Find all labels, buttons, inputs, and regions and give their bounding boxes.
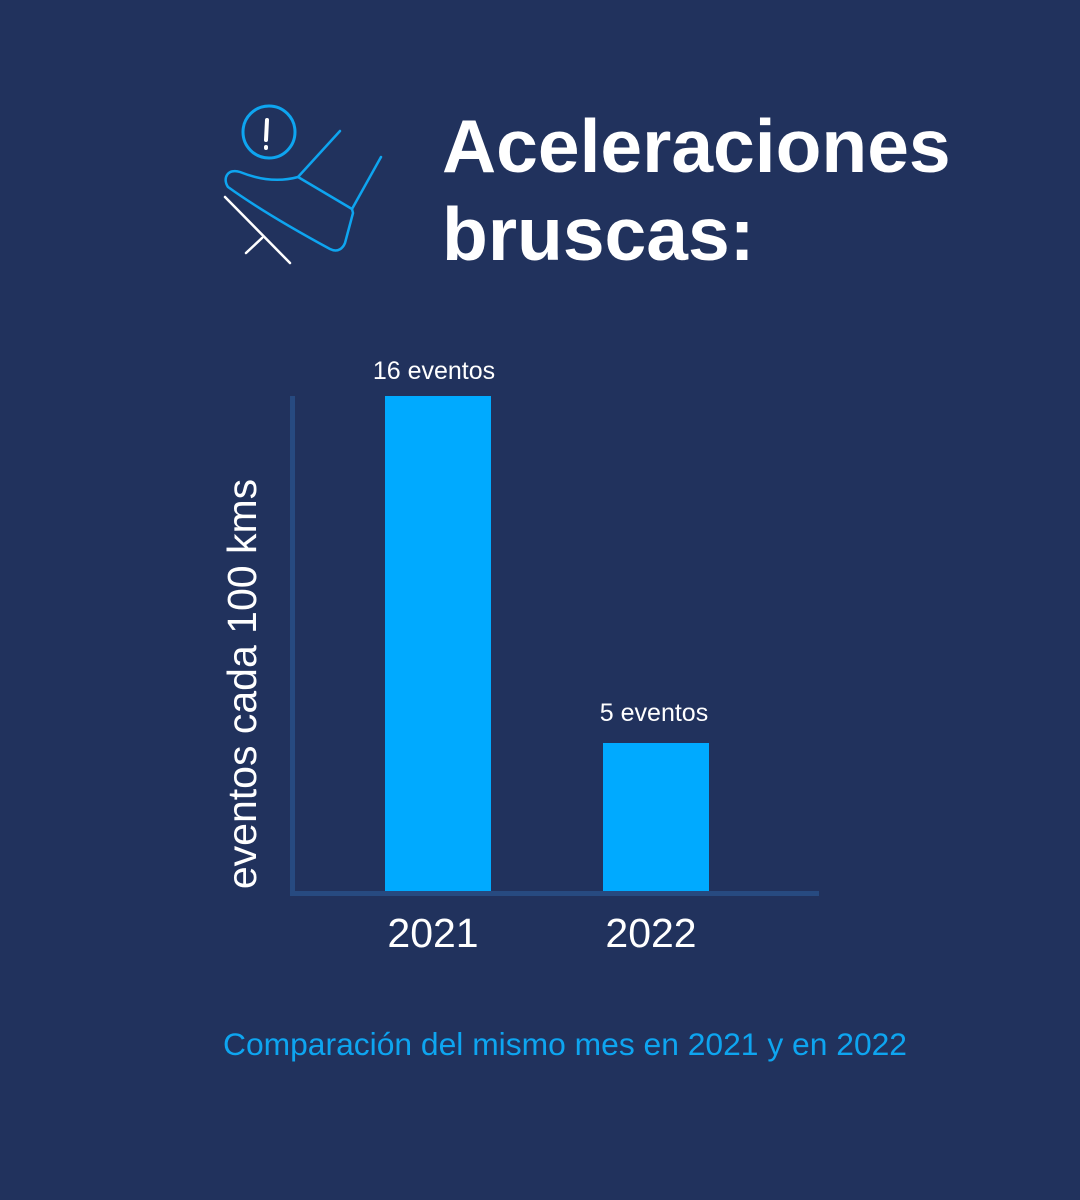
caption: Comparación del mismo mes en 2021 y en 2022	[223, 1026, 907, 1062]
y-axis label: eventos cada 100 kms	[219, 479, 265, 889]
icon: foot on pedal	[224, 104, 382, 264]
axes	[290, 396, 295, 896]
bar chart	[290, 357, 819, 956]
bar 2021	[385, 396, 491, 891]
bar 2022	[603, 743, 709, 891]
label 5 eventos: 5 eventos	[600, 699, 708, 727]
title: bruscas:	[442, 192, 755, 276]
x labels: 2021	[387, 910, 479, 956]
title	[442, 104, 951, 276]
bar chart: 2022	[605, 910, 697, 956]
title: Aceleraciones	[442, 104, 951, 188]
label 16 eventos: 16 eventos	[373, 357, 495, 385]
